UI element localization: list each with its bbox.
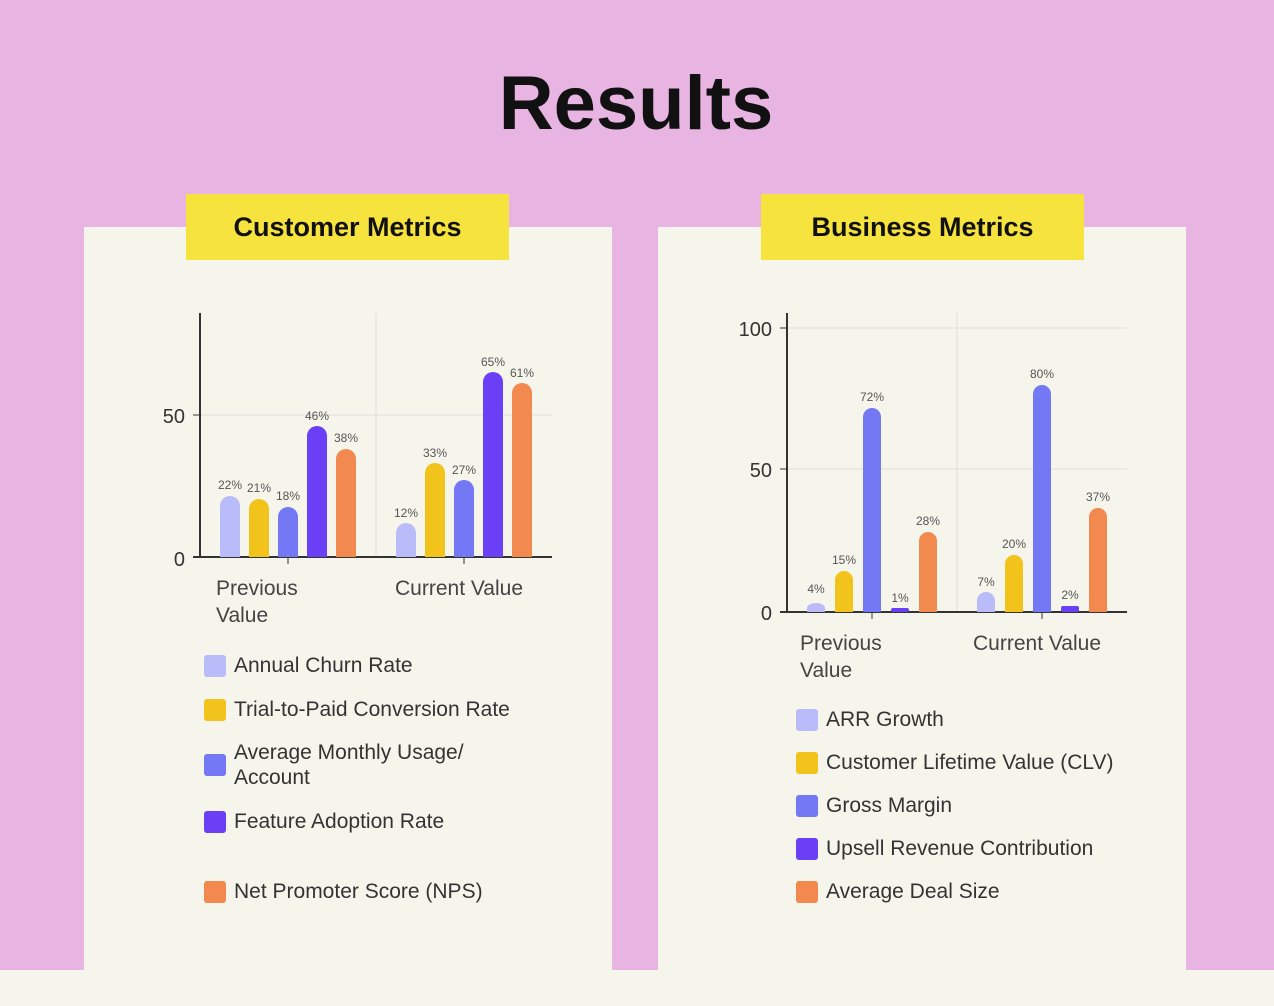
chart: business metrics: 4% <box>807 582 825 596</box>
legend: business metrics: ARR Growth <box>826 708 944 731</box>
legend: customer metrics: Feature Adoption Rate <box>234 810 444 833</box>
chart: customer metrics: Previous <box>216 577 298 600</box>
chart: customer metrics: 21% <box>247 481 271 495</box>
legend: customer metrics: Trial-to-Paid Conversion Rate <box>234 698 510 721</box>
chart: customer metrics: 61% <box>510 366 534 380</box>
chart: customer metrics: 0 <box>174 549 185 571</box>
chart: customer metrics: 27% <box>452 463 476 477</box>
chart: business metrics: Previous <box>800 632 882 655</box>
legend: customer metrics: Account <box>234 766 310 789</box>
chart: business metrics: 2% <box>1061 588 1079 602</box>
legend: customer metrics: Annual Churn Rate <box>234 654 413 677</box>
chart: business metrics: 80% <box>1030 367 1054 381</box>
legend: customer metrics <box>204 654 510 903</box>
chart: business metrics: 37% <box>1086 490 1110 504</box>
chart: customer metrics: 22% <box>218 478 242 492</box>
legend: business metrics: Upsell Revenue Contribution <box>826 837 1093 860</box>
heading: customer metrics <box>186 194 509 260</box>
chart: business metrics: 1% <box>891 591 909 605</box>
title: Results <box>499 61 773 146</box>
chart: business metrics: 7% <box>977 575 995 589</box>
chart: customer metrics: 38% <box>334 431 358 445</box>
chart: business metrics: 28% <box>916 514 940 528</box>
legend: business metrics: Average Deal Size <box>826 880 1000 903</box>
heading: business metrics <box>761 194 1084 260</box>
legend: business metrics: Gross Margin <box>826 794 952 817</box>
chart: customer metrics: 46% <box>305 409 329 423</box>
chart: business metrics: 72% <box>860 390 884 404</box>
chart: customer metrics: 12% <box>394 506 418 520</box>
chart: customer metrics: Current Value <box>395 577 523 600</box>
panel: business metrics <box>658 227 1186 970</box>
legend: customer metrics: Net Promoter Score (NPS) <box>234 880 483 903</box>
panel: customer metrics <box>84 227 612 970</box>
legend: business metrics <box>796 708 1114 903</box>
chart: business metrics: Value <box>800 659 852 682</box>
chart: customer metrics: 33% <box>423 446 447 460</box>
chart: customer metrics: 50 <box>163 406 185 428</box>
chart: customer metrics: 65% <box>481 355 505 369</box>
chart: business metrics: Current Value <box>973 632 1101 655</box>
bottom strip <box>0 970 1274 1006</box>
chart: business metrics: 50 <box>750 460 772 482</box>
legend: customer metrics: Average Monthly Usage/ <box>234 741 464 764</box>
heading: customer metrics: Customer Metrics <box>233 212 462 242</box>
chart: business metrics: 20% <box>1002 537 1026 551</box>
legend: business metrics: Customer Lifetime Value (CLV) <box>826 751 1114 774</box>
chart: business metrics: 0 <box>761 603 772 625</box>
chart: customer metrics: 18% <box>276 489 300 503</box>
chart: customer metrics: Value <box>216 604 268 627</box>
chart: business metrics: 100 <box>739 319 772 341</box>
heading: business metrics: Business Metrics <box>811 212 1034 242</box>
chart: business metrics: 15% <box>832 553 856 567</box>
